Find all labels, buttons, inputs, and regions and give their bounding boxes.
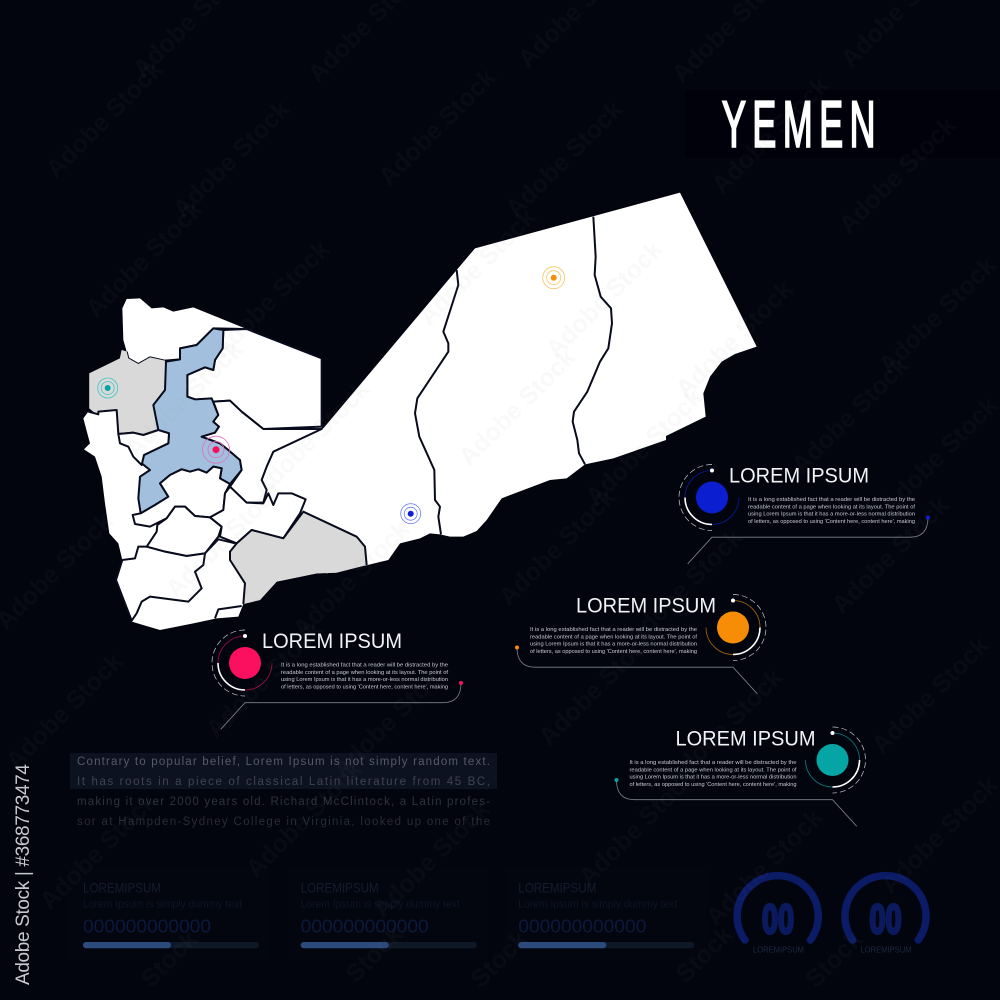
- text block: [630, 760, 797, 788]
- text block: It is a long established fact that a reader will be distracted by the: [630, 760, 796, 766]
- stat panel 3: 000000000000: [518, 916, 646, 937]
- watermarks: Adobe Stock: [700, 803, 828, 931]
- watermarks: Adobe Stock: [327, 655, 455, 783]
- paragraph block: sor at Hampden-Sydney College in Virginia, looked up one of the: [77, 816, 490, 828]
- stat panel 2: 000000000000: [301, 916, 429, 937]
- watermarks: Stock: [465, 925, 533, 993]
- stat panel 1: [70, 868, 270, 960]
- watermarks: Adobe Stock: [533, 623, 661, 751]
- stat panel 2: LOREMIPSUM: [301, 880, 379, 896]
- stock id side label: Adobe Stock | #368773474: [13, 764, 34, 985]
- region: north outline: [127, 328, 245, 364]
- gauge 2: LOREMIPSUM: [860, 945, 912, 955]
- text block: using Lorem Ipsum is that it has a more-or-less normal distribution: [748, 512, 915, 518]
- gauge 2: [845, 876, 926, 955]
- title: YEMEN: YEMEN: [722, 89, 882, 161]
- map: western governorates: [83, 298, 367, 630]
- gauge 2: 00: [870, 896, 902, 942]
- region: south coast inlet: [215, 606, 242, 618]
- text block: [748, 497, 915, 525]
- watermarks: Adobe Stock: [833, 111, 961, 239]
- gauge 1: [737, 876, 818, 955]
- watermarks: Adobe Stock: [786, 351, 914, 479]
- text block: [530, 627, 697, 655]
- text block: [281, 662, 448, 690]
- stat panel 2: [288, 868, 488, 960]
- stat panel 1: 000000000000: [83, 916, 211, 937]
- watermarks: Stock: [800, 925, 868, 993]
- callout: blue: [679, 464, 930, 564]
- watermarks: Adobe Stock: [34, 787, 162, 915]
- watermarks: Adobe Stock: [120, 335, 248, 463]
- icon: orange ring: [515, 594, 766, 694]
- title band: [685, 89, 1000, 161]
- region: below grey: [118, 430, 169, 465]
- watermarks: Adobe Stock: [670, 275, 798, 403]
- watermarks: Adobe Stock: [826, 491, 954, 619]
- watermarks: Adobe Stock: [500, 95, 628, 223]
- gauge 1: LOREMIPSUM: [753, 945, 804, 955]
- paragraph block: It has roots in a piece of classical Latin literature from 45 BC,: [77, 776, 490, 788]
- icon: teal ring: [614, 727, 866, 826]
- watermarks: Adobe Stock: [413, 203, 541, 331]
- watermarks: Adobe Stock: [540, 235, 668, 363]
- region: south-east grey border: [230, 512, 367, 604]
- watermarks: Adobe Stock: [167, 95, 295, 223]
- text block: of letters, as opposed to using 'Content here, content here', making: [630, 782, 796, 788]
- region: east of centre: [210, 487, 306, 543]
- watermarks: Adobe Stock: [706, 71, 834, 199]
- watermarks: Adobe Stock: [875, 391, 1000, 519]
- icon: pink ring: [212, 630, 463, 729]
- map: eastern governorates: [227, 193, 757, 573]
- text block: readable content of a page when looking at its layout. The point of: [281, 670, 448, 676]
- watermarks: Adobe Stock: [0, 647, 128, 775]
- watermarks: Adobe Stock: [493, 483, 621, 611]
- map of Yemen: [83, 193, 757, 630]
- region: west grey: [89, 350, 166, 435]
- callout: orange: [515, 594, 766, 694]
- paragraph block: making it over 2000 years old. Richard McClintock, a Latin profes-: [77, 796, 490, 808]
- watermarks: Adobe Stock: [873, 251, 1000, 379]
- heading: LOREM IPSUM: [676, 728, 816, 750]
- stat panel 3: LOREMIPSUM: [518, 880, 596, 896]
- text block: readable content of a page when looking at its layout. The point of: [630, 767, 797, 773]
- watermarks: Adobe Stock: [207, 235, 335, 363]
- text block: using Lorem Ipsum is that it has a more-or-less normal distribution: [630, 774, 796, 780]
- region: south-east grey: [230, 512, 367, 604]
- stat panel 1: Lorem Ipsum is simply dummy text: [83, 899, 242, 911]
- text block: It is a long established fact that a reader will be distracted by the: [281, 662, 448, 668]
- text block: of letters, as opposed to using 'Content here, content here', making: [530, 649, 697, 655]
- paragraph block: Contrary to popular belief, Lorem Ipsum is not simply random text.: [77, 756, 490, 768]
- watermarks: Stock: [340, 920, 408, 988]
- stat panel 2: Lorem Ipsum is simply dummy text: [301, 899, 460, 911]
- watermarks: Stock: [135, 925, 203, 993]
- text block: readable content of a page when looking at its layout. The point of: [748, 504, 915, 510]
- text block: using Lorem Ipsum is that it has a more-or-less normal distribution: [281, 677, 448, 683]
- watermarks: Adobe Stock: [287, 515, 415, 643]
- watermarks: Adobe Stock: [40, 55, 168, 183]
- map marker: orange: [543, 267, 565, 289]
- stat panel 3: Lorem Ipsum is simply dummy text: [518, 899, 677, 911]
- watermarks: Adobe Stock: [247, 375, 375, 503]
- text block: using Lorem Ipsum is that it has a more-or-less normal distribution: [530, 642, 697, 648]
- gauge 1: 00: [762, 896, 794, 942]
- region: north-east inner: [187, 329, 322, 429]
- region: central-east: [202, 401, 322, 503]
- watermarks: Adobe Stock: [875, 771, 1000, 899]
- text block: of letters, as opposed to using 'Content here, content here', making: [281, 684, 448, 690]
- watermarks: Adobe Stock: [80, 195, 208, 323]
- watermarks: Stock: [670, 920, 738, 988]
- watermarks: Adobe Stock: [573, 763, 701, 891]
- stat panel 1: LOREMIPSUM: [83, 880, 161, 896]
- watermarks: Adobe Stock: [373, 63, 501, 191]
- callout: teal: [614, 727, 866, 826]
- paragraph block: [70, 753, 497, 828]
- region: south border: [205, 539, 235, 553]
- region: south-west: [116, 547, 205, 621]
- text block: readable content of a page when looking at its layout. The point of: [530, 634, 697, 640]
- heading: LOREM IPSUM: [576, 594, 716, 618]
- region: below blue: [133, 467, 230, 527]
- text block: of letters, as opposed to using 'Content here, content here', making: [748, 519, 915, 525]
- watermarks: Adobe Stock: [660, 663, 788, 791]
- watermarks: Adobe Stock: [866, 631, 994, 759]
- text block: It is a long established fact that a reader will be distracted by the: [530, 627, 697, 633]
- watermarks: Adobe Stock: [580, 383, 708, 511]
- watermarks: Adobe Stock: [160, 475, 288, 603]
- watermarks: Adobe Stock: [240, 755, 368, 883]
- icon: blue ring: [679, 464, 930, 564]
- map marker: blue: [401, 504, 421, 524]
- watermarks: Adobe Stock: [367, 795, 495, 923]
- watermarks: Adobe Stock: [620, 523, 748, 651]
- heading: LOREM IPSUM: [729, 464, 869, 488]
- callout: pink: [212, 630, 463, 729]
- map marker: teal: [98, 378, 118, 398]
- stat panel 3: [506, 868, 706, 960]
- region: central blue: [138, 328, 242, 513]
- map marker: pink: [202, 436, 230, 463]
- watermarks: Adobe Stock: [453, 343, 581, 471]
- watermarks: Adobe Stock: [200, 615, 328, 743]
- region: west grey lower border: [88, 410, 158, 435]
- region: middle: [147, 507, 222, 556]
- text block: It is a long established fact that a reader will be distracted by the: [748, 497, 915, 503]
- heading: LOREM IPSUM: [262, 630, 402, 653]
